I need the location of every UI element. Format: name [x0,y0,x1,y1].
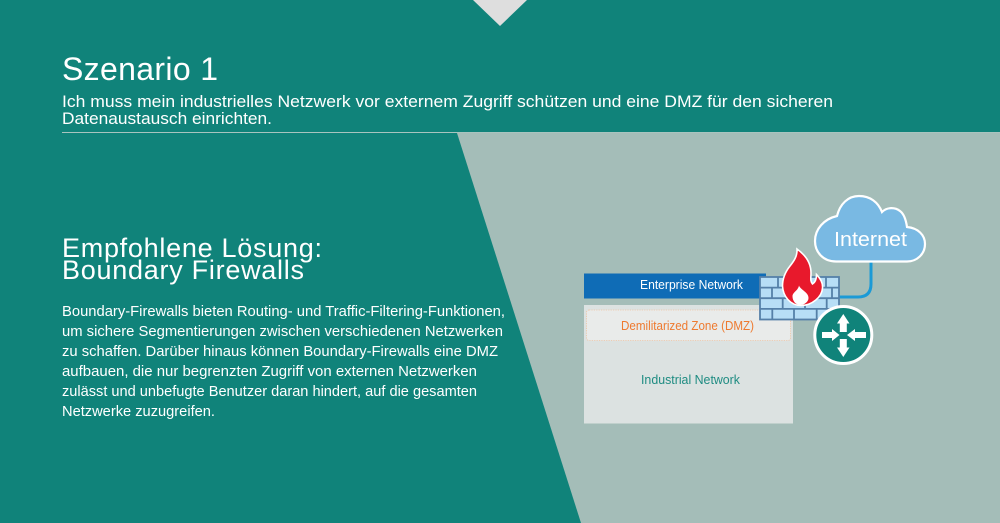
body text [62,304,505,420]
DMZ box: Demilitarized Zone (DMZ) [621,318,754,333]
body text: zu schaffen. Darüber hinaus können Boundary-Firewalls eine DMZ [62,344,498,360]
heading: recommended solution [62,233,322,285]
industrial network box: Industrial Network [641,373,741,387]
icon: internet cloud: Internet [834,228,907,251]
body text: Netzwerke zuzugreifen. [62,404,215,420]
icon: internet cloud [815,196,925,262]
icon: router [815,306,872,364]
DMZ box [586,310,790,340]
subtitle: Ich muss mein industrielles Netzwerk vor externem Zugriff schützen und eine DMZ für den sicheren [62,93,833,111]
panel: grey diagram background [457,133,1000,523]
body text: um sichere Segmentierungen zwischen verschiedenen Netzwerken [62,324,503,340]
heading: recommended solution: Boundary Firewalls [62,255,304,285]
subtitle: Datenaustausch einrichten. [62,110,272,128]
enterprise network bar: Enterprise Network [640,278,744,292]
industrial network box [584,305,793,424]
body text: aufbauen, die nur begrenzten Zugriff von externen Netzwerken [62,364,477,380]
enterprise network bar [584,274,766,298]
icon: flame [782,249,823,306]
body text: zulässt und unbefugte Benutzer daran hindert, auf die gesamten [62,384,477,400]
body text: Boundary-Firewalls bieten Routing- und Traffic-Filtering-Funktionen, [62,304,505,320]
subtitle [62,93,833,128]
title: Szenario 1 [62,51,218,87]
top notch triangle [473,0,527,26]
heading: recommended solution: Empfohlene Lösung: [62,233,322,263]
connector line: cloud to firewall [838,260,871,297]
icon: firewall [760,277,839,320]
network diagram [584,196,925,424]
